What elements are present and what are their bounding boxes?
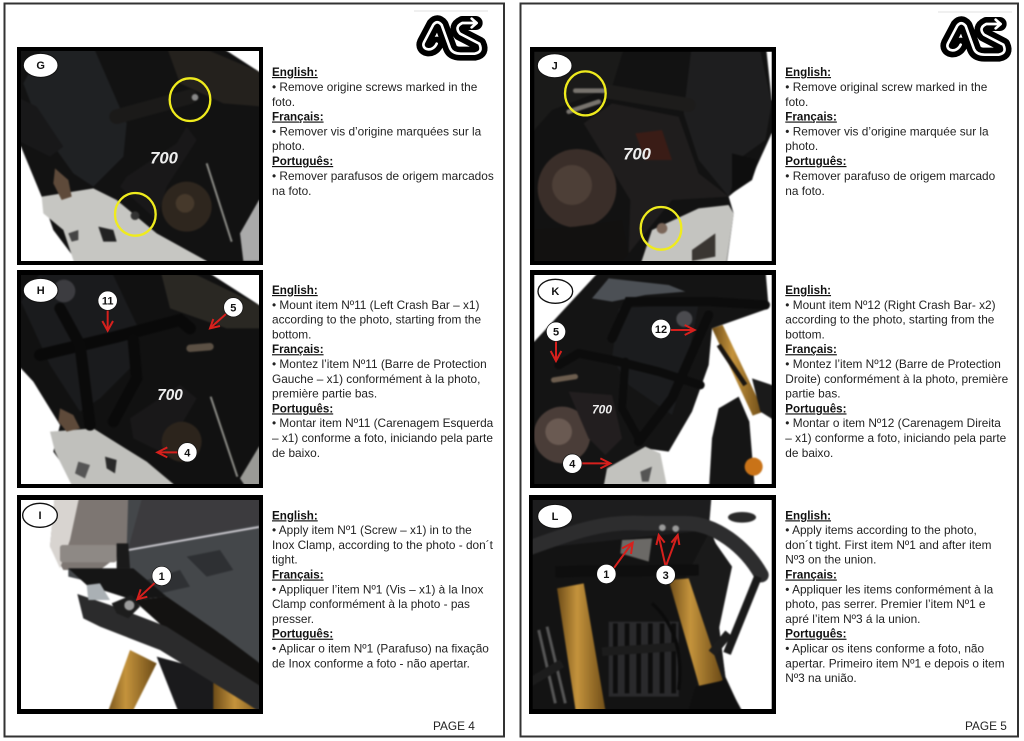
text: step I instructions: Português: [272,628,333,641]
text: step L instructions: Nº3 on the union. [785,553,876,567]
text: step G instructions: • Remove origine screws marked in the [272,80,478,94]
text: step H instructions [272,284,494,460]
marker: screw circle top [170,78,210,121]
text: step G instructions: na foto. [272,184,311,198]
text: step I instructions: Français: [272,568,324,582]
text: step K instructions: • Mount item Nº12 (Right Crash Bar- x2) [785,298,996,312]
logo: AS page 5 [938,12,1012,55]
photo: step K [521,262,785,497]
callout: item 3 [656,535,679,585]
text: step G instructions: English: [272,66,318,79]
text: step L instructions: • Apply items according to the photo, [785,523,977,537]
text: step L instructions: Français: [785,568,837,582]
badge: L: L [552,511,559,523]
text: step I instructions: • Appliquer l’item Nº1 (Vis – x1) à la Inox [272,582,483,596]
text: step G instructions: • Remover parafusos de origem marcados [272,169,494,183]
text: step I instructions: • Aplicar o item Nº1 (Parafuso) na fixação [272,642,489,656]
text: step H instructions: première partie bas. [272,387,377,401]
photo: step J [521,38,785,274]
text: step I instructions: de Inox conforme a foto - não apertar. [272,656,470,670]
callout: item 3: 3 [663,570,669,582]
text: step L instructions: don´t tight. First item Nº1 and after item [785,538,992,552]
callout: item 1 [597,543,633,584]
text: step G instructions: photo. [272,139,305,153]
photo: step K: 700 [592,403,612,417]
badge: K [538,279,573,303]
callout: item 5 [546,322,566,361]
badge: G [23,53,58,77]
callout: item 5: 5 [553,327,559,339]
text: step J instructions [785,66,996,198]
callout: item 5 [210,298,243,328]
callout: item 4: 4 [184,447,191,459]
text: step H instructions: Português: [272,402,333,415]
marker: screw circle bottom [641,207,681,250]
photo: step L [519,487,785,722]
text: step J instructions: Français: [785,110,837,124]
text: step K instructions: – x1) conforme a foto, iniciando pela parte [785,431,1007,445]
text: step G instructions: Français: [272,110,324,124]
text: step K instructions [785,284,1009,460]
badge: L [538,504,572,528]
page number 5: PAGE 5 [965,719,1007,733]
text: step J instructions: photo. [785,139,818,153]
text: step L instructions: English: [785,509,831,522]
photo: step H [8,262,272,497]
badge: I [23,503,57,527]
text: step H instructions: • Mount item Nº11 (Left Crash Bar – x1) [272,298,479,312]
panel: page 4 [4,4,504,736]
text: step J instructions: Português: [785,155,847,168]
text: step H instructions: • Montez l’item Nº11 (Barre de Protection [272,357,487,371]
text: step L instructions: • Appliquer les items conformément à la [785,582,994,596]
photo: step J: 700 [623,144,652,163]
text: step I instructions [272,509,494,670]
logo: AS page 4 [414,11,488,54]
photo: step H: 700 [157,387,183,404]
text: step H instructions: English: [272,284,318,297]
text: step K instructions: • Montez l’item Nº12 (Barre de Protection [785,357,1001,371]
text: step G instructions: foto. [272,95,295,109]
badge: G: G [36,60,45,72]
text: step K instructions: partie bas. [785,387,841,401]
badge: I: I [38,510,42,522]
text: step H instructions: Français: [272,343,324,356]
text: step I instructions: Clamp conformément à la photo - pas [272,597,470,611]
text: step J instructions: foto. [785,95,808,109]
text: step K instructions: • Montar o item Nº12 (Carenagem Direita [785,416,1001,430]
photo: step G: 700 [150,148,179,167]
badge: J: J [552,60,558,72]
text: step H instructions: according to the photo, starting from the [272,313,482,327]
marker: screw circle bottom [115,193,156,236]
text: step H instructions: de baixo. [272,446,320,460]
callout: item 4 [157,443,197,462]
text: step K instructions: de baixo. [785,446,833,460]
text: step L instructions: Nº3 na união. [785,671,857,685]
text: step L instructions [785,509,1005,685]
text: step J instructions: na foto. [785,184,825,198]
text: step L instructions: • Aplicar os itens conforme a foto, não [785,642,984,656]
text: step K instructions: bottom. [785,327,825,341]
text: step H instructions: bottom. [272,327,311,341]
panel: page 5 [519,4,1018,736]
page number 4: PAGE 4 [433,719,475,733]
callout: item 1 [137,566,171,599]
text: step G instructions: Português: [272,155,333,168]
text: step I instructions: • Apply item Nº1 (Screw – x1) in to the [272,523,472,537]
callout: item 12 [651,319,695,339]
callout: item 4: 4 [569,459,576,471]
badge: H: H [37,285,45,297]
text: step L instructions: apré l’item Nº3 á la union. [785,612,920,626]
text: step K instructions: according to the photo, starting from the [785,313,995,327]
text: step J instructions: English: [785,66,831,79]
callout: item 12: 12 [655,324,667,336]
badge: J [537,54,572,78]
text: step I instructions: English: [272,509,318,522]
text: step H instructions: – x1) conforme a foto, iniciando pela parte [272,431,493,445]
marker: screw circle top [565,71,606,115]
badge: H [23,278,58,302]
text: step K instructions: Droite) conformément à la photo, première [785,372,1009,386]
text: step H instructions: • Montar item Nº11 (Carenagem Esquerda [272,416,494,430]
callout: item 11 [98,291,117,331]
text: step L instructions: Português: [785,628,847,641]
text: step J instructions: • Remove original screw marked in the [785,80,988,94]
text: step I instructions: presser. [272,612,314,626]
callout: item 5: 5 [230,302,236,314]
text: step K instructions: Français: [785,343,837,356]
text: step J instructions: • Remover vis d’origine marquée sur la [785,124,989,138]
callout: item 1: 1 [603,569,609,581]
text: step K instructions: English: [785,284,831,297]
text: step I instructions: tight. [272,553,298,567]
text: step I instructions: Inox Clamp, according to the photo - don´t [272,538,494,552]
callout: item 4 [563,454,610,473]
text: step G instructions: • Remover vis d’origine marquées sur la [272,124,482,138]
text: step K instructions: Português: [785,402,847,415]
text: step G instructions [272,66,494,198]
callout: item 11: 11 [102,296,113,308]
text: step J instructions: • Remover parafuso de origem marcado [785,169,996,183]
photo: step I [8,487,272,722]
text: step L instructions: apertar. Primeiro item Nº1 e depois o item [785,656,1005,670]
callout: item 1: 1 [159,571,165,583]
badge: K: K [551,286,559,298]
text: step L instructions: photo, pas serrer. Premier l’item Nº1 e [785,597,986,611]
text: step H instructions: Gauche – x1) conformément à la photo, [272,372,480,386]
photo: step G [8,38,272,274]
